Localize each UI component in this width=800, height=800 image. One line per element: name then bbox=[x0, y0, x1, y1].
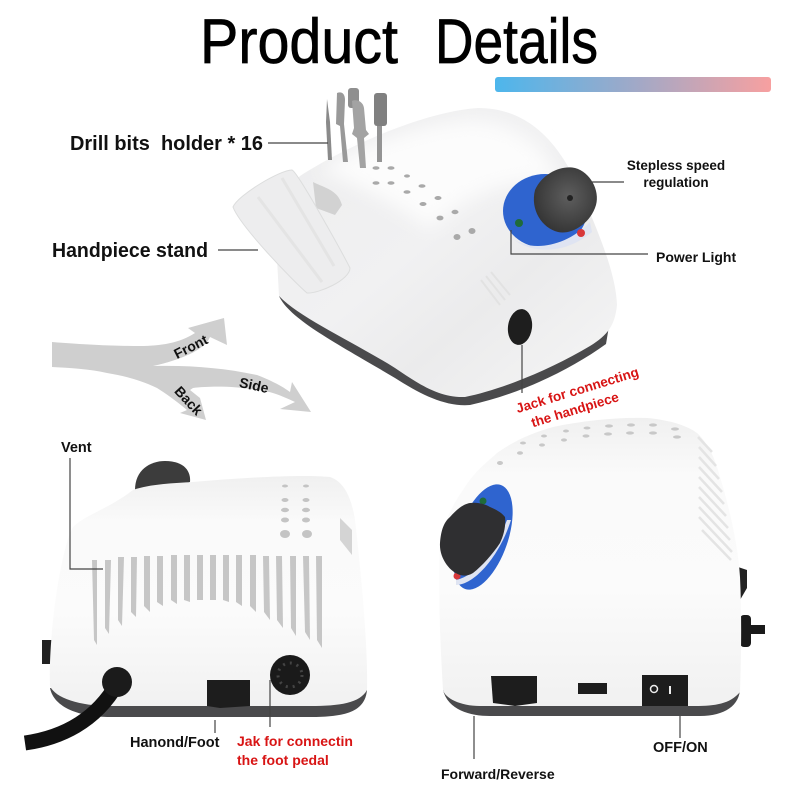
label: stepless speed regulation: Stepless speed bbox=[627, 158, 725, 173]
label: off on: OFF/ON bbox=[653, 740, 708, 756]
forward reverse rocker bbox=[491, 676, 537, 706]
label: drill bits holder: Drill bits holder * 16 bbox=[70, 133, 263, 155]
label: vent: Vent bbox=[61, 440, 92, 456]
top holes bbox=[372, 166, 476, 240]
device base bbox=[279, 280, 610, 405]
title: Details bbox=[435, 7, 598, 77]
rear base bbox=[50, 688, 367, 717]
label: jack for connecting the handpiece bbox=[514, 345, 646, 433]
speed dial bbox=[503, 167, 597, 250]
direction arrows bbox=[52, 318, 311, 420]
drill bits bbox=[326, 88, 387, 168]
power switch bbox=[642, 675, 688, 706]
label: forward reverse: Forward/Reverse bbox=[441, 766, 555, 782]
vent ridges bbox=[481, 272, 510, 305]
arrow label: back: Back bbox=[171, 383, 206, 418]
gradient accent bar bbox=[495, 77, 771, 92]
arrow label: front: Front bbox=[171, 331, 211, 362]
title: Product bbox=[200, 7, 398, 77]
label: jack for connecting the handpiece: Jack for connecting bbox=[514, 364, 641, 416]
shell highlight bbox=[320, 120, 565, 230]
side back switch bbox=[738, 567, 747, 600]
label: hanond/foot: Hanond/Foot bbox=[130, 735, 220, 751]
rear top holes bbox=[280, 484, 312, 538]
rear vent slots bbox=[92, 555, 322, 648]
label: jak for connecting the foot pedal: the foot pedal bbox=[237, 752, 329, 768]
rear notch bbox=[340, 518, 352, 555]
title bbox=[200, 7, 598, 77]
rear shell bbox=[50, 476, 367, 706]
label: power light bbox=[511, 230, 736, 265]
handpiece jack bbox=[506, 308, 534, 346]
arrow label: side: Side bbox=[238, 374, 270, 396]
side vent ridges bbox=[698, 437, 732, 560]
usb slot bbox=[578, 683, 607, 694]
device shell bbox=[276, 108, 617, 397]
side top holes bbox=[497, 423, 681, 465]
label: stepless speed regulation bbox=[592, 158, 725, 190]
rear side switch bbox=[42, 640, 52, 664]
label: handpiece stand: Handpiece stand bbox=[52, 240, 208, 262]
rear device view bbox=[25, 461, 367, 743]
label: jack for connecting the handpiece: the handpiece bbox=[529, 389, 621, 430]
side base bbox=[443, 688, 740, 716]
label: off on bbox=[653, 716, 708, 756]
rear rocker switch bbox=[207, 680, 250, 708]
side dial bbox=[440, 477, 525, 597]
label: vent bbox=[61, 440, 103, 569]
label: stepless speed regulation: regulation bbox=[643, 175, 709, 190]
handpiece stand cup bbox=[233, 170, 350, 293]
label: power light: Power Light bbox=[656, 249, 736, 265]
label: hanond/foot bbox=[130, 720, 220, 751]
rear knob bbox=[135, 461, 190, 492]
side shell bbox=[439, 418, 741, 706]
top device: main view bbox=[233, 88, 617, 405]
label: jak for connecting the foot pedal: Jak for connectin bbox=[237, 733, 353, 749]
foot pedal socket bbox=[270, 655, 310, 695]
power cable bbox=[25, 667, 132, 743]
side device view bbox=[439, 418, 765, 716]
label: forward reverse bbox=[441, 716, 555, 782]
label: jak for connecting the foot pedal bbox=[237, 680, 353, 768]
side cable plug bbox=[740, 615, 765, 647]
